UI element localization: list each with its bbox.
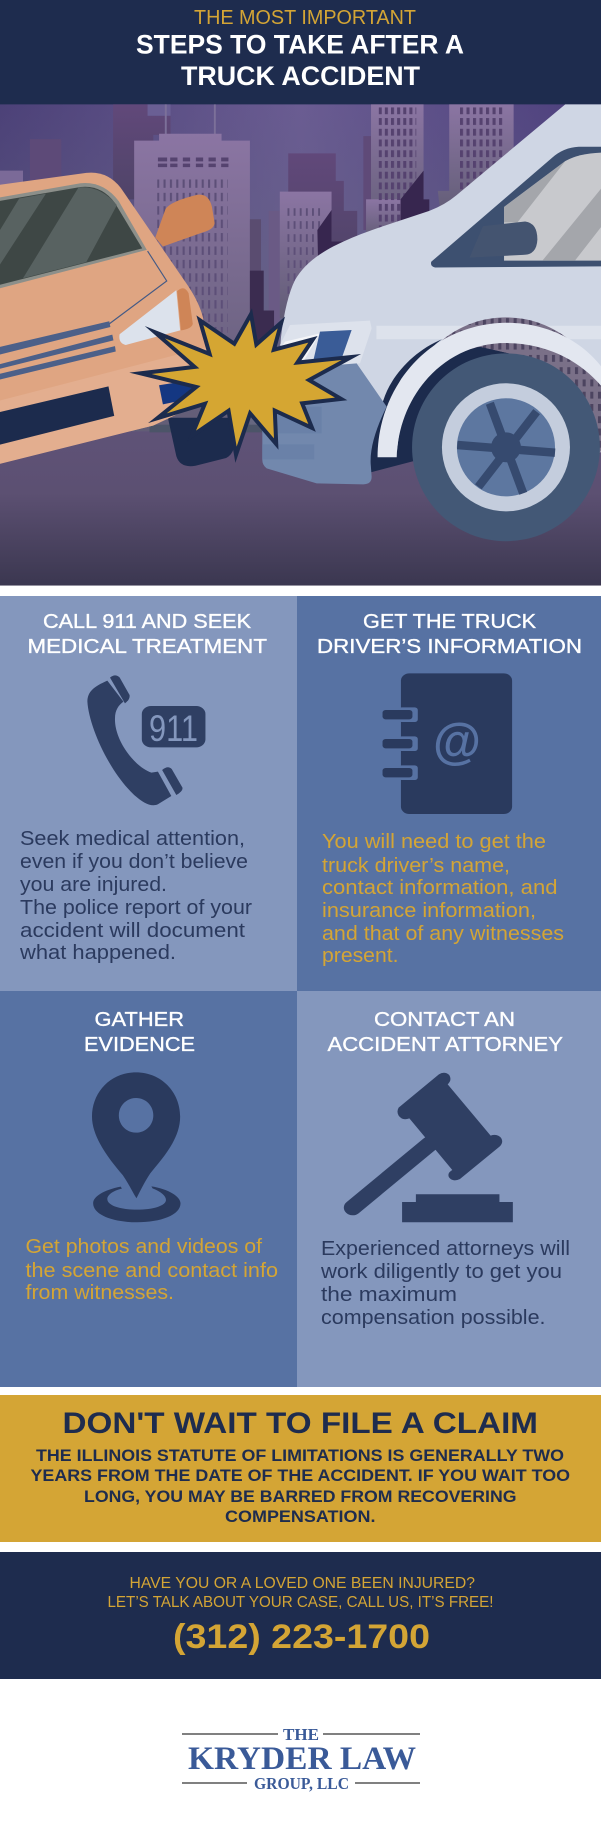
panel: driver's information (297, 596, 601, 991)
truck bumper (262, 363, 387, 484)
body text: accident will document (20, 920, 245, 942)
body text: Get photos and videos of (26, 1236, 262, 1258)
body text: from witnesses. (26, 1282, 174, 1304)
truck (278, 104, 601, 452)
body text: the maximum (321, 1284, 457, 1306)
heading: ACCIDENT ATTORNEY (328, 1034, 563, 1056)
city skyline (0, 104, 601, 434)
panel: gather evidence (0, 991, 297, 1387)
heading: EVIDENCE (84, 1034, 195, 1056)
header panel (0, 0, 601, 105)
car mirror (155, 195, 215, 246)
body text: and that of any witnesses (322, 923, 564, 945)
heading (317, 611, 582, 658)
illustration: truck and car collision in city (0, 104, 601, 586)
body text: contact information, and (322, 877, 558, 899)
body text: insurance information, (322, 900, 536, 922)
body text: compensation possible. (321, 1307, 546, 1329)
callout text: COMPENSATION. (225, 1508, 376, 1526)
icon: address book: @ (433, 713, 481, 769)
body text: the scene and contact info (26, 1260, 278, 1282)
logo (182, 1725, 420, 1793)
phone number: (312) 223-1700 (173, 1618, 430, 1656)
heading: CALL 911 AND SEEK (43, 611, 252, 633)
heading: GATHER (94, 1009, 184, 1031)
callout text: LONG, YOU MAY BE BARRED FROM RECOVERING (84, 1488, 516, 1506)
icon: gavel (353, 1073, 513, 1222)
body text (320, 1238, 570, 1329)
body text: work diligently to get you (320, 1261, 562, 1283)
body text: The police report of your (20, 897, 252, 919)
heading: DRIVER’S INFORMATION (317, 636, 582, 658)
heading (328, 1009, 563, 1056)
body text (322, 831, 564, 967)
heading: CONTACT AN (374, 1009, 515, 1031)
heading (28, 611, 267, 658)
icon: phone 911: 911 (149, 708, 198, 749)
logo: GROUP, LLC (254, 1774, 349, 1793)
heading: MEDICAL TREATMENT (28, 636, 267, 658)
title: STEPS TO TAKE AFTER A (136, 30, 464, 60)
car (0, 173, 235, 466)
icon: phone 911 (87, 675, 205, 805)
callout text: THE ILLINOIS STATUTE OF LIMITATIONS IS GENERALLY TWO (36, 1447, 564, 1465)
road (0, 431, 601, 586)
truck headlight (280, 321, 372, 367)
car windshield (0, 183, 147, 288)
body text: you are injured. (20, 874, 167, 896)
logo: KRYDER LAW (188, 1741, 416, 1777)
title (136, 30, 464, 91)
call to action text (108, 1575, 494, 1611)
panel: call 911 (0, 596, 297, 991)
body text: truck driver’s name, (322, 855, 510, 877)
body text: Seek medical attention, (20, 828, 245, 850)
panel: don't wait callout (0, 1395, 601, 1542)
car tire (168, 418, 235, 466)
car headlight (119, 290, 180, 345)
truck wheel (412, 353, 600, 541)
body text (26, 1236, 278, 1304)
panel: contact attorney (297, 991, 601, 1387)
truck window (431, 147, 601, 268)
title: TRUCK ACCIDENT (181, 61, 420, 91)
logo: THE (283, 1725, 319, 1744)
body text: even if you don’t believe (20, 851, 248, 873)
call to action text: HAVE YOU OR A LOVED ONE BEEN INJURED? (130, 1575, 475, 1592)
car body (0, 173, 210, 464)
callout heading: DON'T WAIT TO FILE A CLAIM (62, 1407, 538, 1440)
icon: address book (383, 673, 512, 814)
body text: what happened. (19, 942, 176, 964)
heading: GET THE TRUCK (363, 611, 537, 633)
call to action text: LET’S TALK ABOUT YOUR CASE, CALL US, IT’S FREE! (108, 1594, 494, 1611)
body text: You will need to get the (322, 831, 546, 853)
callout text: YEARS FROM THE DATE OF THE ACCIDENT. IF YOU WAIT TOO (30, 1467, 570, 1485)
callout text (30, 1447, 570, 1526)
body text: Experienced attorneys will (321, 1238, 570, 1260)
body text (19, 828, 252, 964)
collision burst (152, 320, 342, 447)
body text: present. (322, 945, 398, 967)
icon: location pin (92, 1072, 181, 1222)
panel: call to action (0, 1552, 601, 1679)
truck wheel arch (370, 317, 601, 472)
heading (84, 1009, 195, 1056)
truck bumper and burst (152, 320, 387, 484)
truck body (278, 104, 601, 452)
subtitle: THE MOST IMPORTANT (194, 7, 416, 29)
car grille (0, 321, 116, 379)
